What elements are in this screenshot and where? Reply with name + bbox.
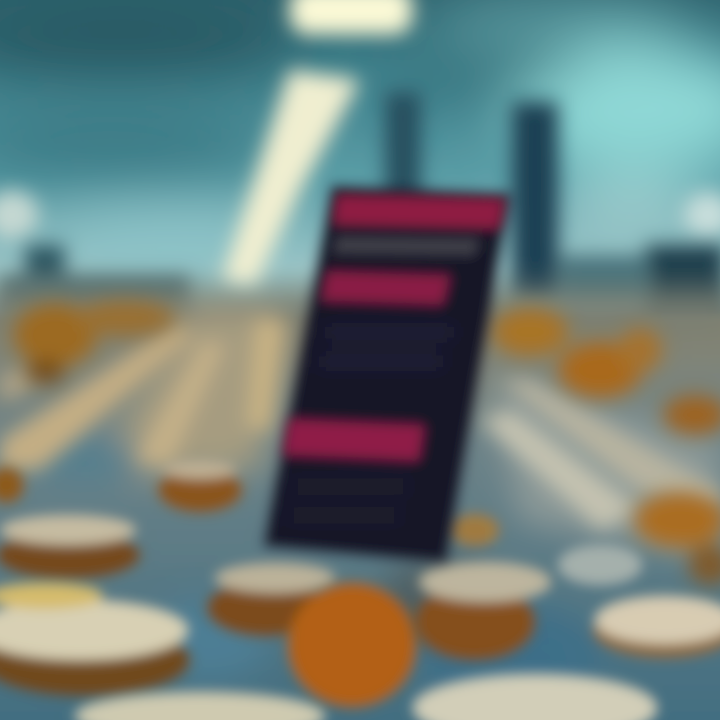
light beam — [222, 70, 360, 285]
coin: right flat — [593, 596, 720, 658]
foreground coins — [0, 461, 720, 720]
horizon coins right — [492, 308, 720, 585]
coin: bottom centre flat — [75, 692, 325, 720]
coin: centre orange — [288, 583, 416, 707]
panel header bar — [332, 194, 506, 230]
coin: bottom left stack — [0, 583, 190, 696]
sky — [0, 0, 720, 340]
sun glow — [290, 0, 412, 34]
road streaks — [0, 320, 720, 530]
text block one — [316, 325, 457, 369]
coin: left edge — [0, 467, 24, 503]
coin: bottom right flat — [413, 674, 657, 720]
ground — [0, 290, 720, 720]
distant towers — [0, 92, 720, 370]
coin: mid left — [158, 461, 242, 512]
coin: centre left — [207, 563, 335, 636]
section bar two — [282, 418, 426, 462]
panel subtitle line — [332, 236, 480, 256]
coin: right mid — [558, 545, 642, 585]
coin: centre right — [415, 514, 551, 660]
coin: left stack — [0, 515, 140, 579]
text block two — [284, 480, 413, 522]
dark phone panel — [264, 186, 510, 562]
section bar one — [320, 270, 452, 306]
horizon coins left — [13, 300, 175, 384]
